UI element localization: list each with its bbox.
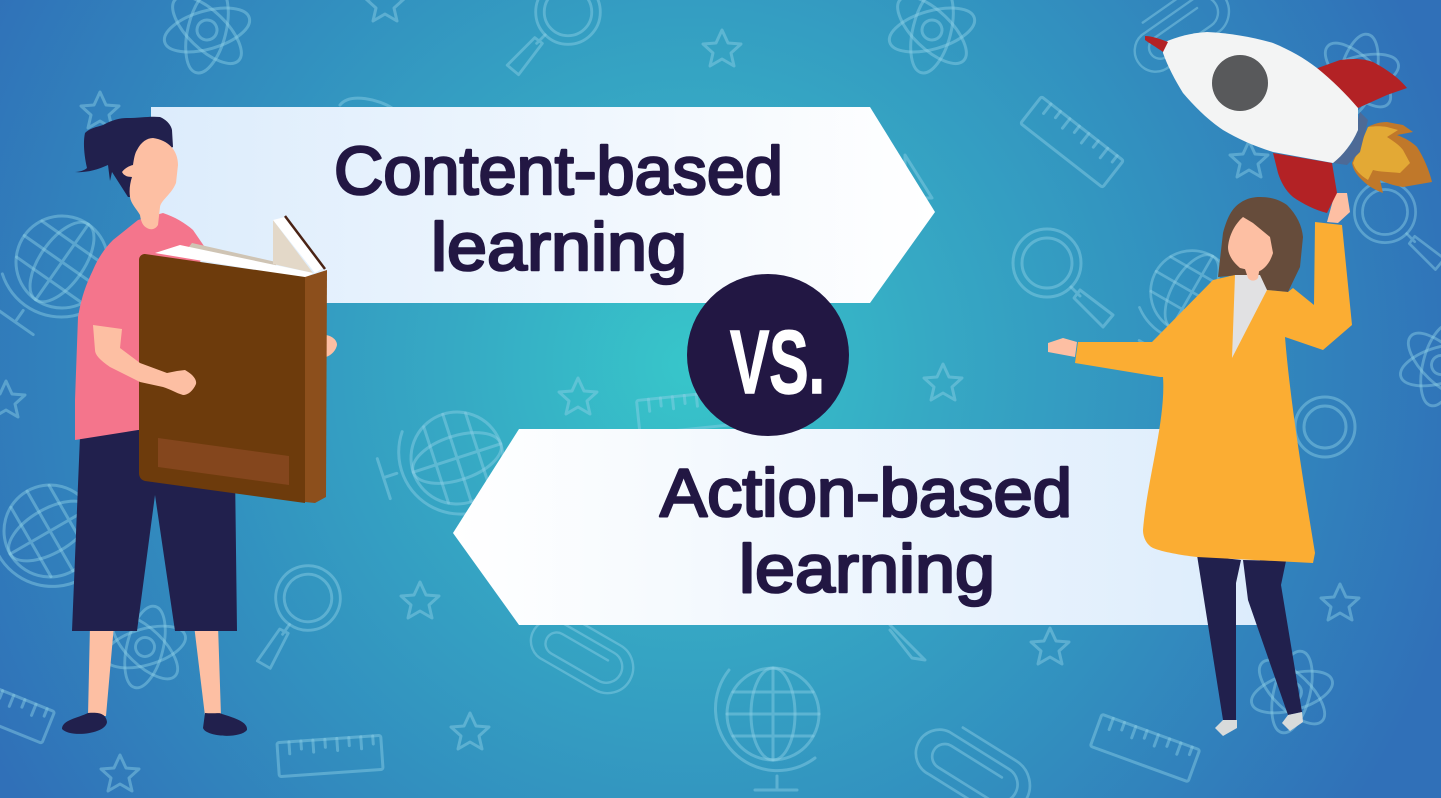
yellow coat [1075, 222, 1352, 563]
raised hand [1327, 193, 1350, 223]
vs. badge [687, 274, 849, 436]
shorts [72, 425, 237, 631]
face and neck [122, 138, 178, 229]
pink shirt [75, 213, 204, 440]
collar and neck [1232, 275, 1267, 358]
icon: rocket [1145, 32, 1432, 213]
heading: Content-based learning: learning [431, 209, 687, 285]
legs and shoes [1197, 555, 1303, 736]
face [1228, 217, 1273, 272]
hair back [1218, 197, 1303, 292]
banner: content-based learning [151, 107, 935, 303]
nose [1145, 36, 1168, 52]
outstretched hand [1048, 338, 1077, 357]
nozzle [1333, 112, 1368, 165]
character: woman reading a large book [62, 117, 337, 736]
fins [1315, 59, 1407, 108]
flame [1352, 122, 1432, 193]
hair [75, 117, 173, 197]
heading: Content-based learning: Content-based [334, 133, 783, 209]
legs and shoes [62, 625, 247, 736]
heading: Action-based learning: learning [739, 531, 995, 607]
vs. badge: VS. [730, 313, 825, 413]
heading: Action-based learning [660, 455, 1072, 607]
body [1163, 32, 1358, 163]
banner: action-based learning [453, 429, 1260, 625]
book [139, 216, 327, 503]
hand behind book [326, 335, 337, 357]
character: woman launching a rocket [1048, 193, 1352, 736]
heading: Action-based learning: Action-based [660, 455, 1072, 531]
window [1212, 55, 1268, 111]
heading: Content-based learning [334, 133, 783, 285]
arm and fist [93, 325, 196, 395]
